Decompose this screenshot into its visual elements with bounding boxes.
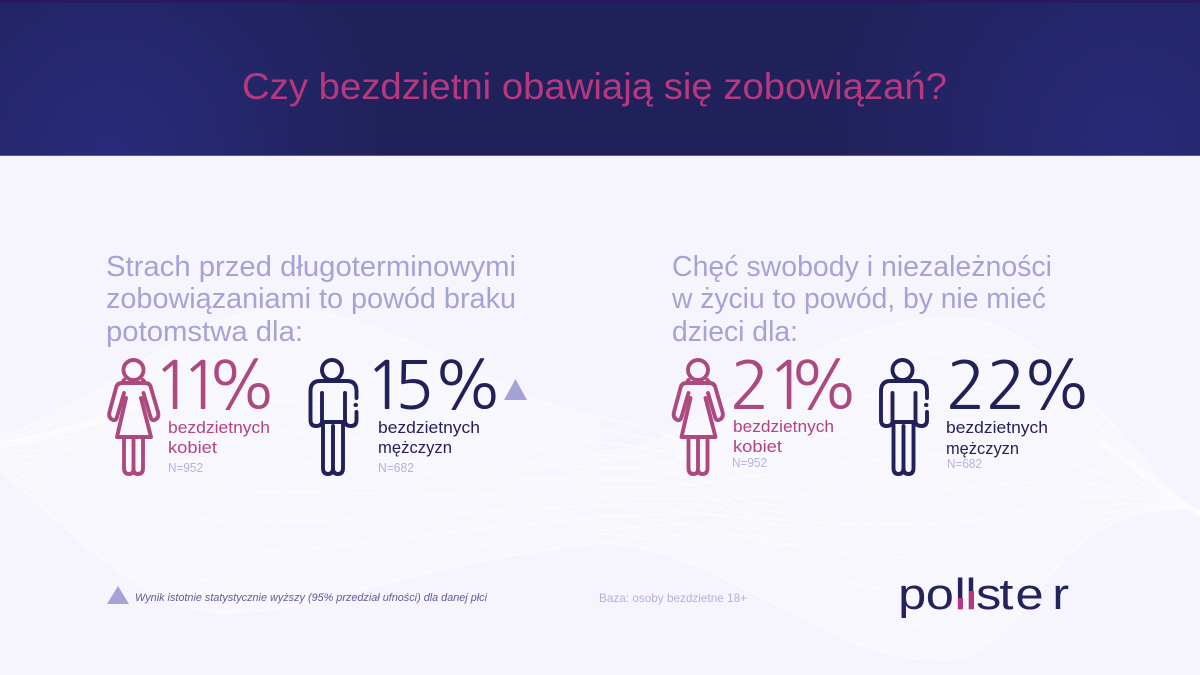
label: women bbox=[733, 417, 834, 456]
header band bbox=[0, 0, 1200, 156]
label: men: bezdzietnych bbox=[946, 418, 1048, 437]
label: women: bezdzietnych bbox=[168, 418, 270, 437]
icon: woman bbox=[109, 360, 158, 474]
label: women: kobiet bbox=[168, 438, 217, 457]
heading: freedom: w życiu to powód, by nie mieć bbox=[671, 283, 1046, 315]
icon: legend triangle bbox=[107, 586, 129, 604]
stat: 11% women: 11% bbox=[153, 353, 278, 419]
label: women: kobiet bbox=[733, 437, 782, 456]
stat: 15% men: 15% bbox=[365, 353, 504, 419]
heading: fear of commitments: Strach przed długoterminowymi bbox=[106, 251, 516, 283]
heading: freedom: dzieci dla: bbox=[672, 316, 798, 348]
heading: freedom: Chęć swobody i niezależności bbox=[672, 251, 1052, 283]
icon: woman bbox=[674, 360, 723, 474]
label: men: mężczyzn bbox=[946, 439, 1019, 458]
footnote: significance: Wynik istotnie statystycznie wyższy (95% przedział ufności) dla danej płci bbox=[135, 592, 488, 604]
panel: fear of long-term commitments bbox=[106, 251, 527, 475]
label: men: mężczyzn bbox=[378, 438, 452, 457]
heading: fear of commitments: zobowiązaniami to powód braku bbox=[106, 283, 516, 315]
icon: significance triangle bbox=[504, 379, 527, 400]
label: women: bezdzietnych bbox=[733, 417, 834, 436]
sample size: women: N=952 bbox=[732, 455, 767, 470]
label: men bbox=[946, 418, 1048, 458]
sample size: men: N=682 bbox=[378, 460, 414, 475]
heading: fear of commitments: potomstwa dla: bbox=[106, 316, 303, 348]
heading: freedom bbox=[671, 251, 1052, 348]
stat: 22% men: 22% bbox=[946, 353, 1093, 419]
footnote: base: Baza: osoby bezdzietne 18+ bbox=[599, 591, 747, 605]
stat: 21% women: 21% bbox=[730, 353, 860, 419]
heading: fear of commitments bbox=[106, 251, 516, 348]
sample size: women: N=952 bbox=[168, 460, 203, 475]
logo: pollster: pollster bbox=[898, 570, 1069, 619]
icon: man bbox=[310, 360, 356, 474]
icon: man bbox=[881, 360, 927, 474]
label: men bbox=[378, 418, 480, 457]
sample size: men: N=682 bbox=[947, 456, 982, 471]
panel: desire for freedom and independence bbox=[671, 251, 1093, 474]
label: women bbox=[168, 418, 270, 457]
title: Czy bezdzietni obawiają się zobowiązań? bbox=[242, 66, 947, 107]
label: men: bezdzietnych bbox=[378, 418, 480, 437]
